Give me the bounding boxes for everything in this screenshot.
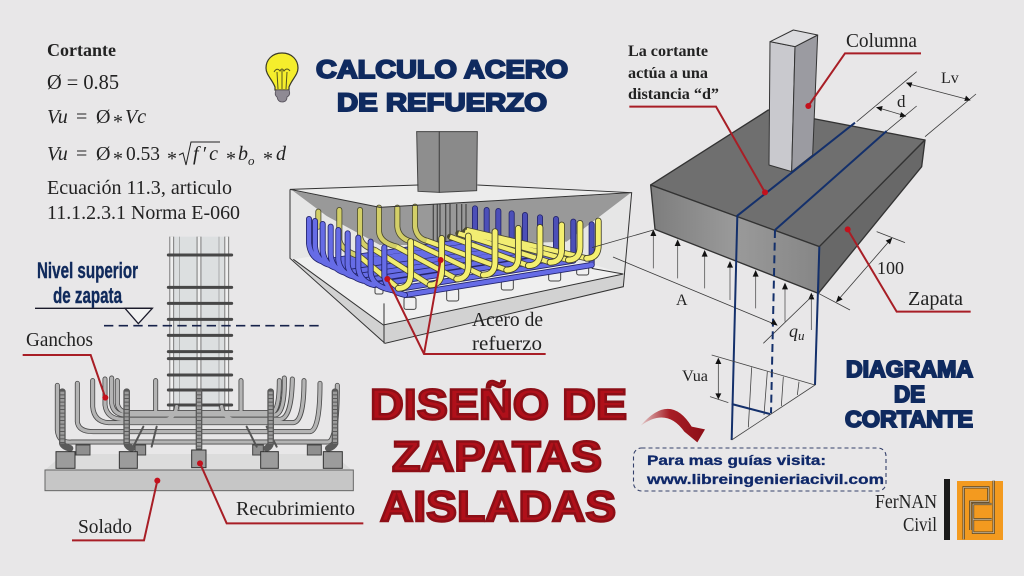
formula: Vu expanded: b xyxy=(238,143,248,165)
callout: website link: Para mas guías visita: xyxy=(647,452,826,468)
label: Nivel superior de zapata: de zapata xyxy=(53,283,123,308)
title: Calculo acero de refuerzo xyxy=(316,56,568,117)
diagram: transparent footing with yellow and blue steel xyxy=(290,132,632,355)
label: Nivel superior de zapata xyxy=(37,258,138,308)
footing wireframe xyxy=(290,185,632,343)
blue front legs xyxy=(309,219,405,295)
label: Solado: Solado xyxy=(78,516,132,538)
formula: Vu expanded: 0.53 xyxy=(126,143,160,165)
diagram: footing with shear section xyxy=(592,30,976,440)
formula: Vu expanded: * xyxy=(263,148,273,170)
label: La cortante actua a una distancia d: La cortante xyxy=(628,43,708,60)
label: Zapata: Zapata xyxy=(908,288,963,310)
label: Ganchos: Ganchos xyxy=(26,329,93,351)
text: equation reference line 1: Ecuación 11.3, articulo xyxy=(47,177,232,199)
callout: website link xyxy=(634,448,886,491)
logo: FerNAN Civil xyxy=(875,479,1003,540)
title: Calculo acero de refuerzo: DE REFUERZO xyxy=(337,89,547,117)
title: Diagrama de cortante: CORTANTE xyxy=(845,406,973,432)
label: La cortante actua a una distancia d: actúa a una xyxy=(628,65,708,82)
dimension arrowheads xyxy=(836,82,971,302)
back spacer blocks xyxy=(76,445,321,455)
label: La cortante actua a una distancia d xyxy=(628,43,719,103)
label: Columna: Columna xyxy=(846,30,917,52)
label: Acero de refuerzo: Acero de xyxy=(472,309,543,331)
formula: Vu = phi Vc: * xyxy=(113,111,123,133)
formula: phi value: Ø = 0.85 xyxy=(47,70,119,94)
formula: Vu expanded: d xyxy=(276,143,287,165)
label: Vua: Vua xyxy=(682,368,708,385)
text block: shear formulas xyxy=(47,40,287,224)
formula: Vu expanded: * xyxy=(226,148,236,170)
dimension lines xyxy=(818,72,976,310)
formula: Vu = phi Vc: Vc xyxy=(125,106,146,128)
yellow far legs and bars xyxy=(318,207,587,288)
red callout: Columna xyxy=(805,53,921,109)
title: Diseño de zapatas aisladas: ZAPATAS xyxy=(392,433,602,481)
title: Diagrama de cortante xyxy=(845,356,973,432)
front vertical bars xyxy=(62,392,335,448)
label: Ganchos xyxy=(23,329,108,401)
column stub xyxy=(417,132,477,192)
red callout: shear distance xyxy=(629,107,768,195)
formula: Vu expanded: f′c xyxy=(193,143,218,165)
label: Nivel superior de zapata: Nivel superior xyxy=(37,258,138,283)
A dimension xyxy=(592,230,813,343)
label: La cortante actua a una distancia d: distancia “d” xyxy=(628,86,719,103)
logo: FerNAN Civil: Civil xyxy=(903,514,937,536)
soil pressure arrows xyxy=(653,233,811,330)
diagram: rebar cage side elevation xyxy=(45,237,353,491)
hooked bars xyxy=(57,378,337,442)
formula: Vu expanded: Vu xyxy=(47,143,68,165)
solado slab xyxy=(45,454,353,491)
grey column dowels xyxy=(423,204,480,247)
formula: Vu expanded: = xyxy=(76,143,87,165)
label: Acero de refuerzo: refuerzo xyxy=(472,333,542,355)
title: Diagrama de cortante: DIAGRAMA xyxy=(846,356,973,382)
icon: light bulb xyxy=(266,53,298,102)
label: q_u xyxy=(789,321,805,343)
title: Diseño de zapatas aisladas: DISEÑO DE xyxy=(370,381,627,429)
formula: Vu = phi Vc: Ø xyxy=(96,106,110,128)
transverse bars xyxy=(133,427,277,447)
label: Acero de refuerzo xyxy=(384,257,546,355)
formula: Vu expanded: * xyxy=(167,148,177,170)
concrete chairs xyxy=(338,264,589,309)
yellow front U legs xyxy=(398,221,598,288)
shear diagram xyxy=(710,355,815,440)
label: q_u: u xyxy=(798,328,805,343)
formula: Vu expanded: Ø xyxy=(96,143,110,165)
heading: Cortante: Cortante xyxy=(47,40,116,60)
formula: Vu = phi Vc: = xyxy=(76,106,87,128)
text: equation reference line 2: 11.1.2.3.1 Norma E-060 xyxy=(47,202,240,224)
formula: Vu expanded xyxy=(47,142,287,170)
label: q_u: q xyxy=(789,321,798,341)
column cage xyxy=(168,237,232,410)
callout: website link: www.libreingenieriacivil.com xyxy=(646,471,884,487)
label: 100: 100 xyxy=(877,258,904,278)
label: Recubrimiento xyxy=(197,460,363,523)
formula: Vu = phi Vc: Vu xyxy=(47,106,68,128)
title: Calculo acero de refuerzo: CALCULO ACERO xyxy=(316,56,568,84)
label: d: d xyxy=(897,92,906,111)
icon: curved red arrow xyxy=(641,409,705,442)
label: Recubrimiento: Recubrimiento xyxy=(236,498,355,520)
label: Lv: Lv xyxy=(941,70,959,87)
front spacer blocks xyxy=(56,450,342,468)
blue far legs and long bars xyxy=(323,208,592,295)
column xyxy=(769,30,818,172)
formula: Vu expanded: o xyxy=(248,153,255,168)
label: Solado xyxy=(72,478,160,540)
formula: Vu expanded: * xyxy=(113,148,123,170)
level marker: triangle and dashed line xyxy=(35,308,320,326)
red callout: Zapata xyxy=(845,226,971,312)
footing solid xyxy=(651,110,925,293)
formula: Vu = phi Vc xyxy=(47,106,146,133)
title: Diseño de zapatas aisladas: AISLADAS xyxy=(380,483,616,531)
footing body xyxy=(290,185,632,343)
label: A: A xyxy=(676,292,688,309)
logo: FerNAN Civil: FerNAN xyxy=(875,491,937,513)
title: Diseño de zapatas aisladas xyxy=(370,381,627,531)
shear section blue lines xyxy=(732,123,887,440)
title: Diagrama de cortante: DE xyxy=(894,381,925,407)
